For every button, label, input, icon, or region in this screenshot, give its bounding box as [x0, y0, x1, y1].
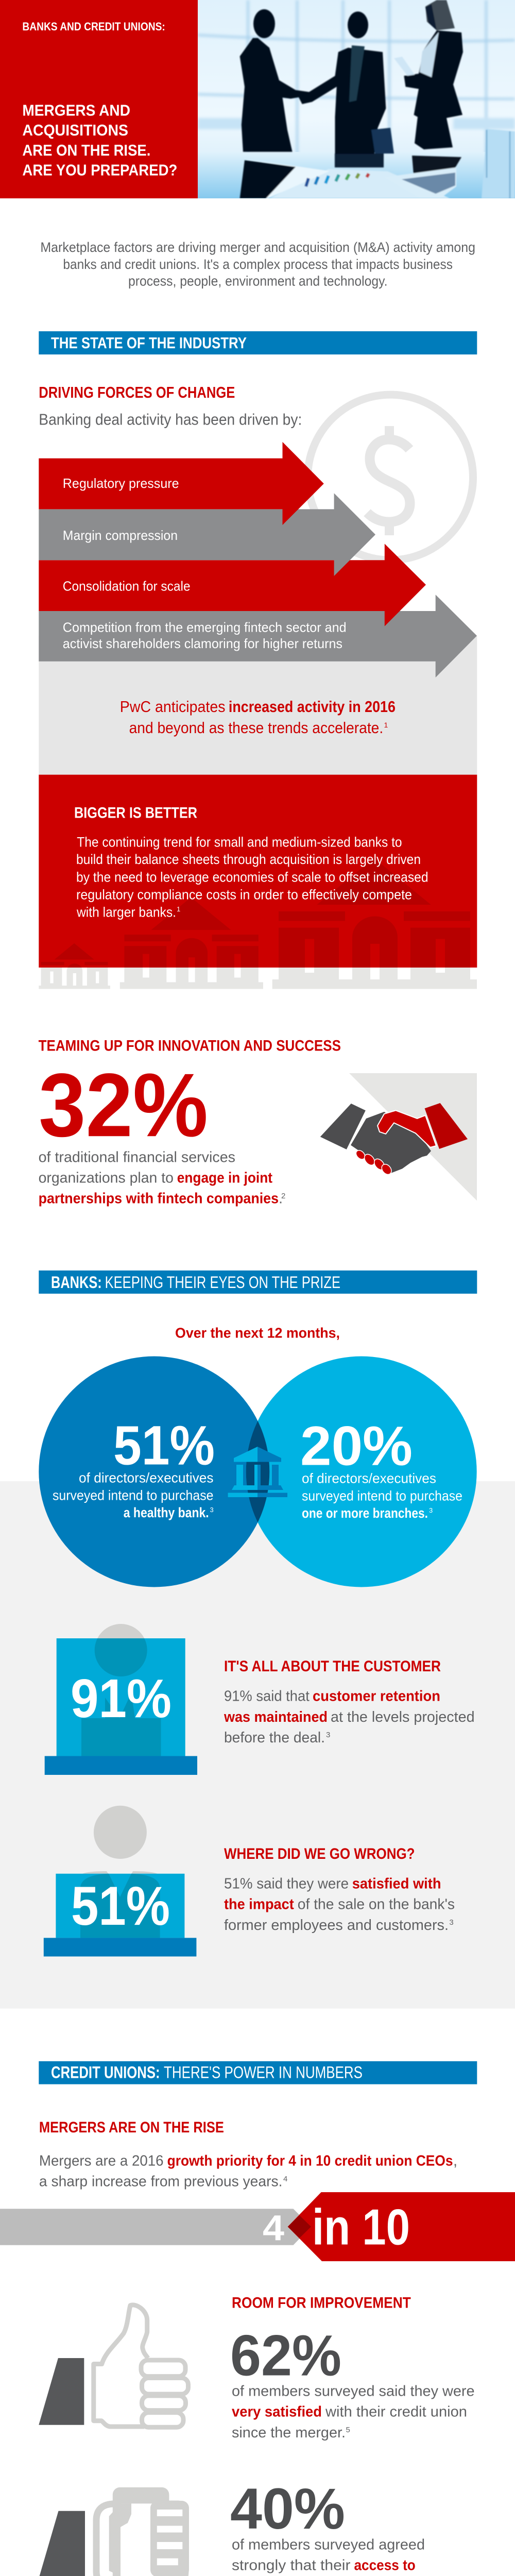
icon: thumbs up: [39, 2305, 188, 2427]
text: all about the customer: before the deal.: [224, 1730, 325, 1746]
icon: handshake: [320, 1073, 477, 1200]
graphic: 4 in 10 chevrons: [0, 2192, 515, 2261]
heading: room for improvement: ROOM FOR IMPROVEMENT: [232, 2294, 411, 2311]
main title: MERGERS AND: [22, 101, 130, 119]
arrow: competition from fintech: Competition from the emerging fintech sector and: [63, 619, 347, 635]
circle: 20% buy branches: 20%: [300, 1415, 413, 1477]
text: where did we go wrong: former employees and customers.: [224, 1917, 449, 1934]
stat: 62%: 62%: [230, 2323, 341, 2387]
lead-in text: Banking deal activity has been driven by:: [39, 410, 302, 429]
circle: 20% buy branches: one or more branches.: [302, 1505, 428, 1521]
hero banner: [0, 0, 515, 198]
text: where did we go wrong: WHERE DID WE GO WRONG?: [224, 1845, 415, 1862]
text: all about the customer: 3: [326, 1731, 330, 1739]
callout: PwC anticipates: and beyond as these trends accelerate.: [129, 719, 383, 737]
main title: ARE ON THE RISE.: [22, 141, 150, 159]
text: growth priority: a sharp increase from previous years.: [39, 2174, 283, 2190]
panel: bigger is better: [39, 775, 477, 989]
graphic: 4 in 10 chevrons: in 10: [312, 2199, 410, 2256]
callout: PwC anticipates: increased activity in 2016: [229, 698, 396, 716]
icon: bank building: [228, 1447, 287, 1497]
circle: 51% buy a healthy bank: 3: [210, 1506, 214, 1514]
intro paragraph: Marketplace factors are driving merger and acquisition (M&A) activity among: [40, 240, 475, 255]
callout: PwC anticipates: PwC anticipates: [120, 698, 226, 716]
text: where did we go wrong: of the sale on the bank's: [298, 1896, 455, 1913]
section bar: credit unions: [39, 2061, 477, 2084]
arrow: consolidation for scale: [39, 544, 426, 626]
stat: 62%: [230, 2323, 475, 2441]
intro paragraph: process, people, environment and technology.: [128, 274, 387, 289]
text: all about the customer: at the levels projected: [331, 1709, 475, 1725]
stat: 62%: since the merger.: [232, 2425, 346, 2441]
arrow: margin compression: Margin compression: [63, 528, 178, 543]
body text: bigger is better: regulatory compliance costs in order to effectively compete: [76, 887, 412, 903]
text: where did we go wrong: 51% said they were: [224, 1875, 349, 1892]
circle: 51% buy a healthy bank: a healthy bank.: [124, 1505, 209, 1520]
icon: hand holding phone: [39, 2487, 189, 2576]
text: growth priority: [39, 2153, 457, 2190]
stat: 62%: of members surveyed said they were: [232, 2383, 475, 2400]
circle: 51% buy a healthy bank: [39, 1356, 269, 1587]
stat: 51% podium figure: 51%: [71, 1875, 170, 1937]
main title: [22, 101, 177, 179]
section bar: banks: BANKS:: [51, 1273, 102, 1292]
heading: mergers are on the rise: MERGERS ARE ON THE RISE: [39, 2119, 224, 2136]
text: fintech partnerships: [39, 1149, 285, 1207]
hero red title panel: [0, 0, 198, 198]
eyebrow heading: BANKS AND CREDIT UNIONS:: [22, 20, 165, 33]
panel: gray panel behind arrows: [39, 636, 477, 775]
stat: 62%: very satisfied: [232, 2404, 322, 2420]
stat: 51% podium figure: [44, 1806, 196, 1957]
circle: 20% buy branches: of directors/executives: [302, 1471, 436, 1486]
text: fintech partnerships: engage in joint: [177, 1170, 272, 1186]
text: all about the customer: customer retention: [313, 1688, 440, 1705]
main title: ARE YOU PREPARED?: [22, 161, 177, 179]
callout: PwC anticipates: 1: [384, 721, 388, 729]
body text: bigger is better: [76, 834, 428, 920]
stat: 40%: 40%: [230, 2477, 345, 2541]
body text: bigger is better: 1: [177, 905, 180, 913]
text: all about the customer: was maintained: [224, 1709, 328, 1725]
main title: ACQUISITIONS: [22, 121, 128, 139]
text: all about the customer: IT'S ALL ABOUT THE CUSTOMER: [224, 1658, 441, 1675]
hero photo: three business people shaking hands: [198, 0, 515, 198]
text: all about the customer: 91% said that: [224, 1688, 310, 1705]
stat: 62%: with their credit union: [325, 2404, 467, 2420]
section bar: banks: [39, 1270, 477, 1294]
body text: bigger is better: The continuing trend for small and medium-sized banks to: [77, 834, 402, 850]
arrow: margin compression: [39, 493, 375, 576]
icon: three bank buildings: [39, 858, 477, 989]
circle: 51% buy a healthy bank: 51%: [113, 1414, 215, 1476]
icon: dollar coin: [308, 395, 473, 560]
graphic: 4 in 10 chevrons: 4: [263, 2208, 284, 2248]
stat: 40%: access to: [354, 2557, 416, 2574]
panel: light gray background: [0, 1481, 515, 2009]
heading: driving forces of change: DRIVING FORCES OF CHANGE: [39, 383, 235, 401]
stat: 32%: 32%: [39, 1055, 208, 1156]
text: growth priority: 4: [283, 2175, 287, 2183]
section bar: credit unions: CREDIT UNIONS:: [51, 2063, 160, 2081]
stat: 62%: 5: [346, 2426, 350, 2434]
circle: 51% buy a healthy bank: of directors/executives: [79, 1470, 213, 1486]
body text: bigger is better: build their balance sheets through acquisition is largely driven: [76, 852, 421, 867]
body text: bigger is better: by the need to leverage economies of scale to offset increased: [76, 870, 428, 885]
text: fintech partnerships: organizations plan to: [39, 1170, 174, 1186]
text: growth priority: Mergers are a 2016: [39, 2153, 164, 2169]
section bar: credit unions: THERE'S POWER IN NUMBERS: [164, 2063, 363, 2081]
stat: 40%: [230, 2477, 450, 2576]
circle: 20% buy branches: [246, 1356, 477, 1587]
text: fintech partnerships: .: [279, 1191, 283, 1207]
body text: bigger is better: with larger banks.: [76, 904, 176, 920]
section bar: the state of the industry: THE STATE OF THE INDUSTRY: [51, 334, 247, 352]
text: fintech partnerships: 2: [281, 1192, 285, 1200]
heading: bigger is better: BIGGER IS BETTER: [74, 804, 197, 821]
section bar: the state of the industry: [39, 331, 477, 354]
heading: teaming up: TEAMING UP FOR INNOVATION AND SUCCESS: [39, 1038, 341, 1054]
arrow: competition from fintech: [39, 595, 477, 677]
text: where did we go wrong: [224, 1845, 455, 1934]
intro paragraph: [40, 240, 475, 289]
text: fintech partnerships: partnerships with fintech companies: [39, 1191, 279, 1207]
stat: 40%: strongly that their: [232, 2557, 351, 2574]
text: where did we go wrong: 3: [449, 1918, 454, 1927]
arrow: regulatory pressure: [39, 442, 324, 525]
text: all about the customer: [224, 1658, 475, 1746]
arrow: regulatory pressure: Regulatory pressure: [63, 476, 179, 491]
text: where did we go wrong: the impact: [224, 1896, 294, 1913]
circle: 20% buy branches: surveyed intend to purchase: [302, 1488, 462, 1503]
stat: 91% podium figure: [45, 1624, 197, 1775]
heading: over the next 12 months: Over the next 12 months,: [175, 1325, 340, 1341]
circle: 20% buy branches: 3: [429, 1506, 433, 1514]
text: growth priority: ,: [453, 2153, 457, 2169]
callout: PwC anticipates: [120, 698, 396, 737]
venn diagram: [39, 1356, 477, 1587]
text: where did we go wrong: satisfied with: [352, 1875, 441, 1892]
arrow: competition from fintech: activist shareholders clamoring for higher returns: [63, 636, 342, 651]
text: fintech partnerships: of traditional financial services: [39, 1149, 235, 1165]
intro paragraph: banks and credit unions. It's a complex process that impacts business: [63, 257, 453, 272]
stat: 91% podium figure: 91%: [71, 1668, 171, 1729]
section bar: banks: KEEPING THEIR EYES ON THE PRIZE: [105, 1273, 340, 1292]
text: growth priority: growth priority for 4 in 10 credit union CEOs: [167, 2153, 453, 2169]
stat: 40%: of members surveyed agreed: [232, 2536, 425, 2553]
circle: 51% buy a healthy bank: surveyed intend to purchase: [53, 1487, 213, 1503]
arrow: consolidation for scale: Consolidation for scale: [63, 579, 191, 594]
